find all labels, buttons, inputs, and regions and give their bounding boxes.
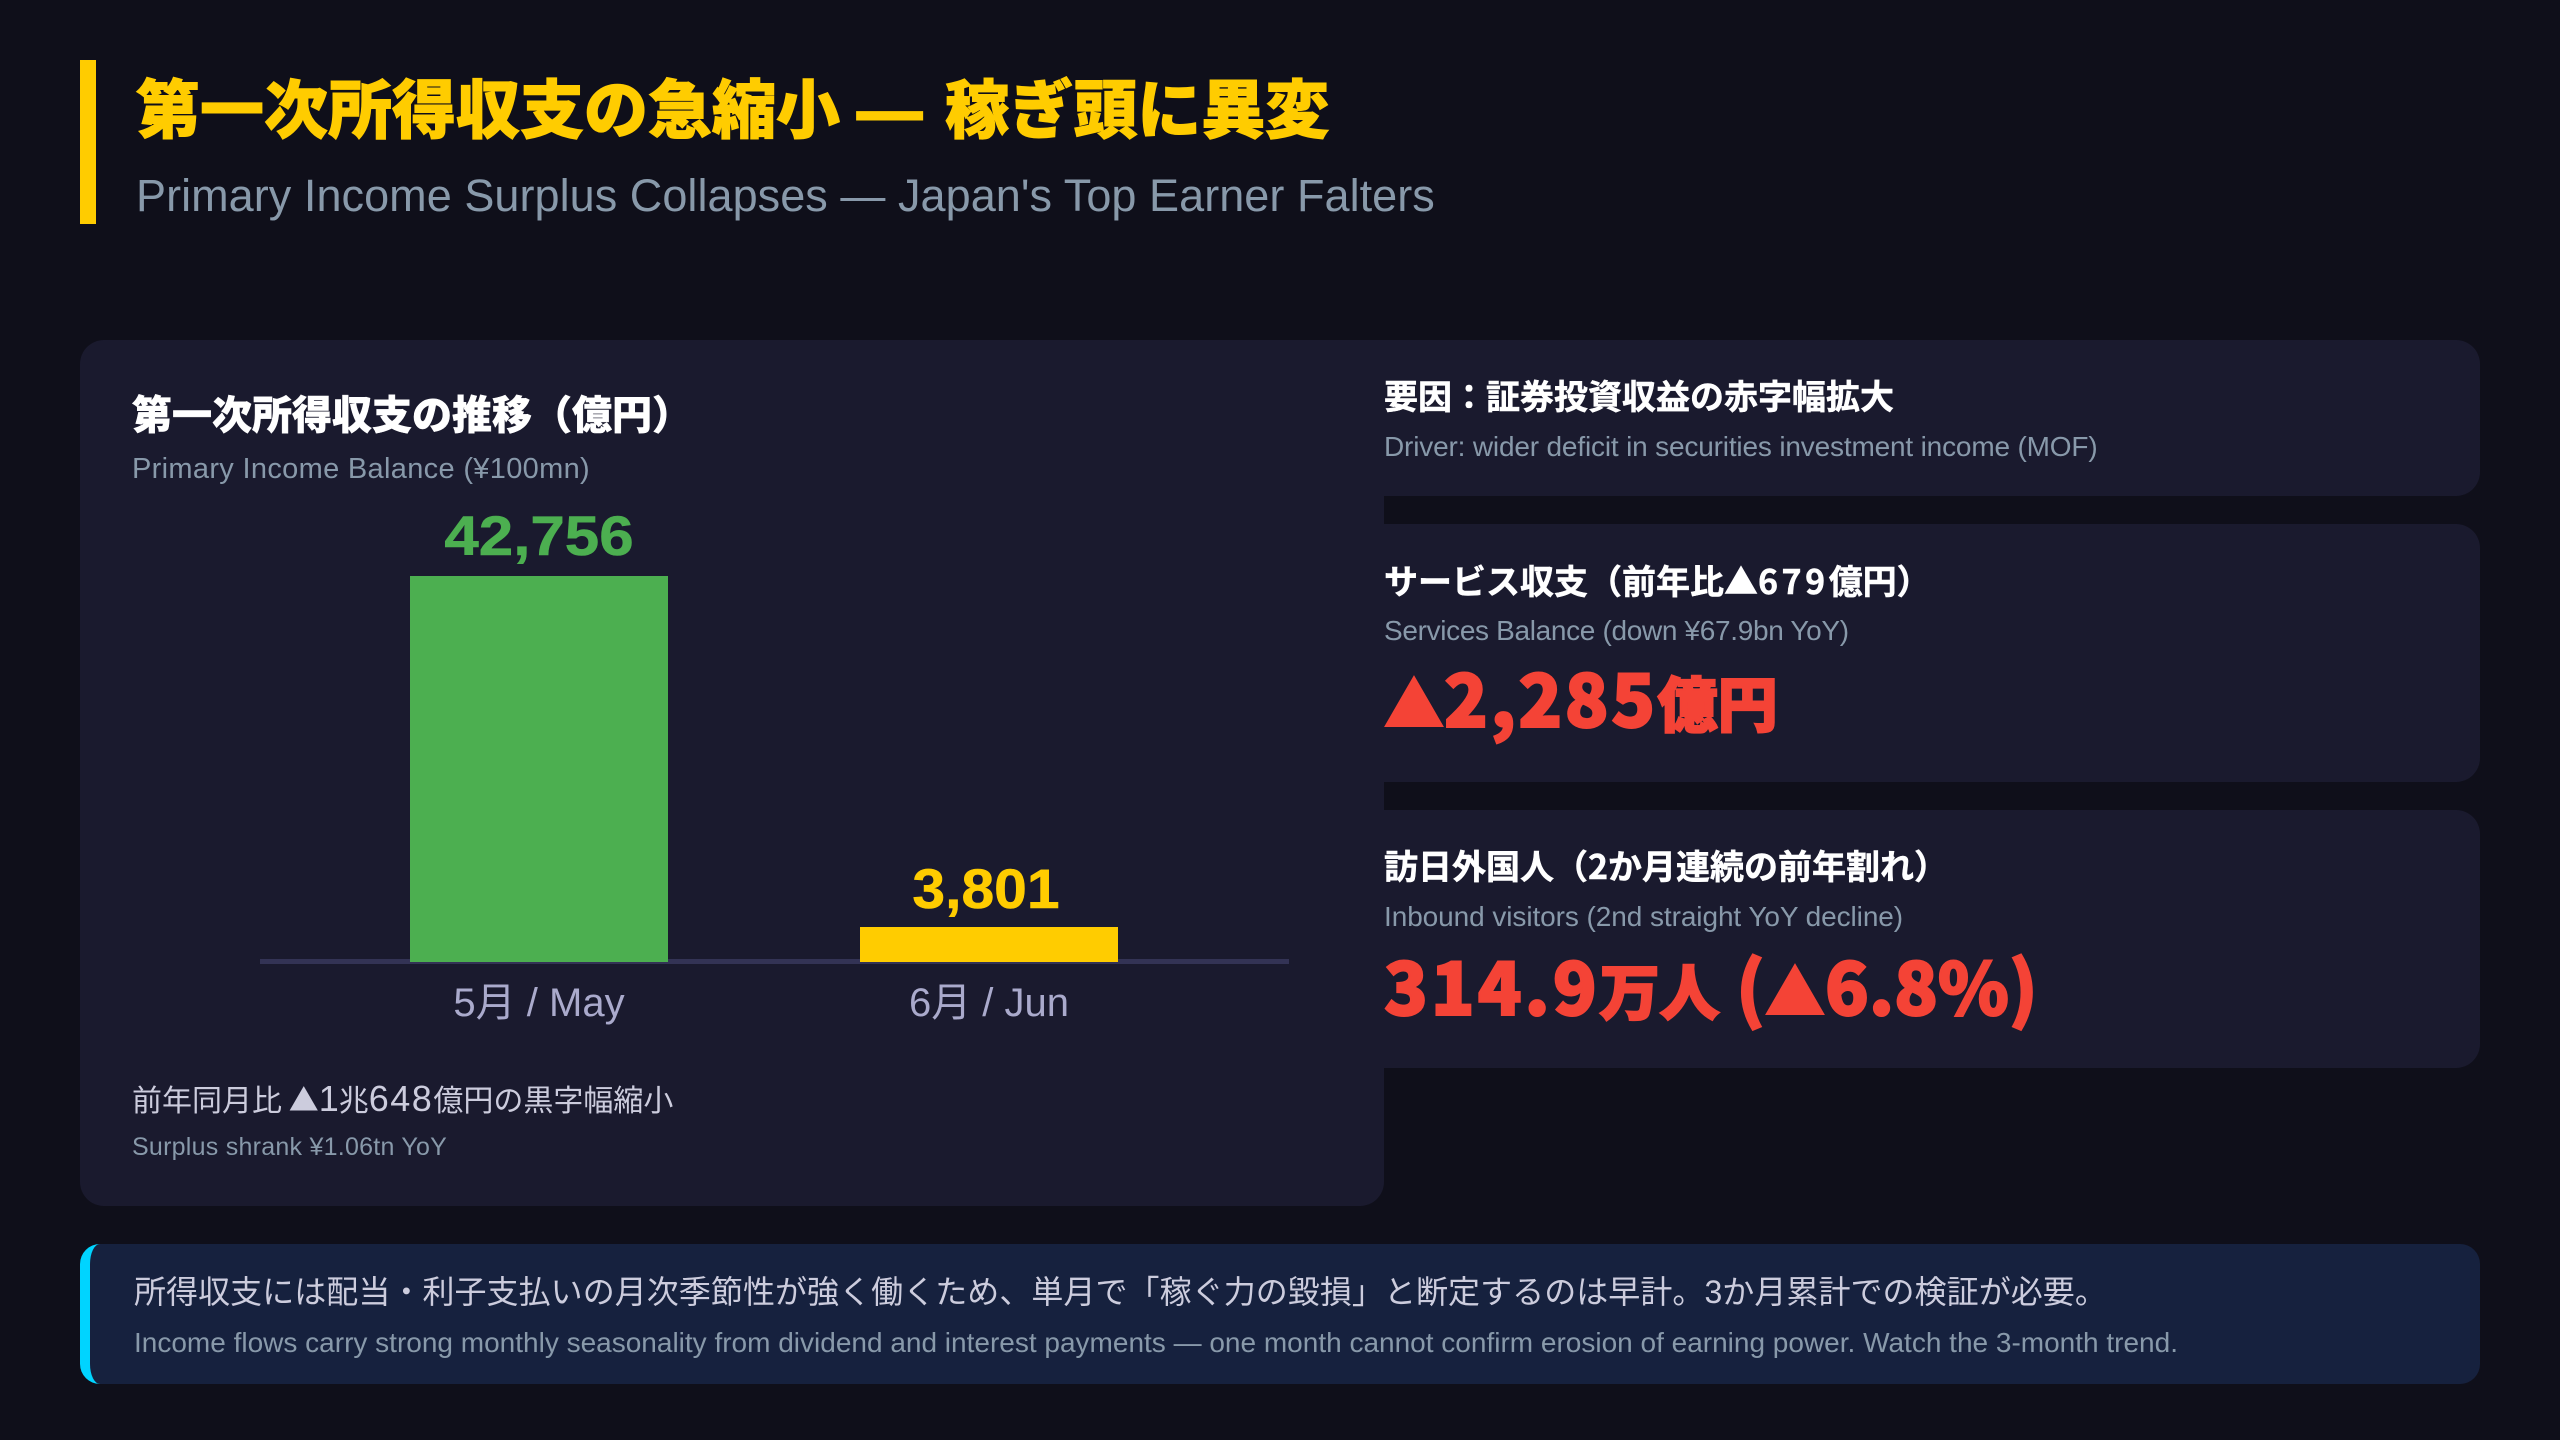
callout text english: Income flows carry strong monthly seasonality from dividend and interest payments — one month cannot confirm erosion of earning power. Watch the 3-month trend. [134, 1327, 2178, 1358]
value: May: 42,756 [444, 504, 634, 567]
services figure: ▲2,285億円 [1384, 643, 1778, 748]
services english: Services Balance (down ¥67.9bn YoY) [1384, 615, 1849, 646]
driver english: Driver: wider deficit in securities investment income (MOF) [1384, 431, 2098, 462]
value: June: 3,801 [912, 857, 1060, 920]
title accent bar [80, 60, 96, 224]
bar chart [260, 504, 1289, 1025]
axis label: June: 6月 / Jun [909, 981, 1069, 1025]
title: 第一次所得収支の急縮小 — 稼ぎ頭に異変 [136, 60, 1329, 152]
driver heading: 要因：証券投資収益の赤字幅拡大 [1384, 370, 1894, 419]
bar: June [860, 927, 1118, 962]
axis label: May: 5月 / May [453, 981, 625, 1025]
chart note english: Surplus shrank ¥1.06tn YoY [132, 1133, 447, 1161]
inbound figure: 314.9万人 (▲6.8%) [1384, 931, 2038, 1036]
panel: services balance [1384, 524, 2480, 782]
panel: inbound visitors [1384, 810, 2480, 1068]
panel: primary income chart [80, 340, 1384, 1206]
panel: driver [1384, 340, 2480, 496]
bar: May [410, 576, 668, 962]
panel heading: 第一次所得収支の推移（億円） [132, 383, 692, 441]
inbound english: Inbound visitors (2nd straight YoY decline) [1384, 901, 1903, 932]
services heading: サービス収支（前年比▲679億円） [1384, 555, 1931, 604]
panel subheading: Primary Income Balance (¥100mn) [132, 453, 590, 485]
subtitle: Primary Income Surplus Collapses — Japan's Top Earner Falters [136, 170, 1435, 221]
callout text japanese: 所得収支には配当・利子支払いの月次季節性が強く働くため、単月で「稼ぐ力の毀損」と断定するのは早計。3か月累計での検証が必要。 [134, 1274, 2107, 1310]
baseline axis [260, 959, 1289, 964]
inbound heading: 訪日外国人（2か月連続の前年割れ） [1384, 840, 1948, 889]
chart note: 前年同月比 ▲1兆648億円の黒字幅縮小 [132, 1076, 673, 1120]
callout: seasonality caveat [80, 1244, 2480, 1384]
